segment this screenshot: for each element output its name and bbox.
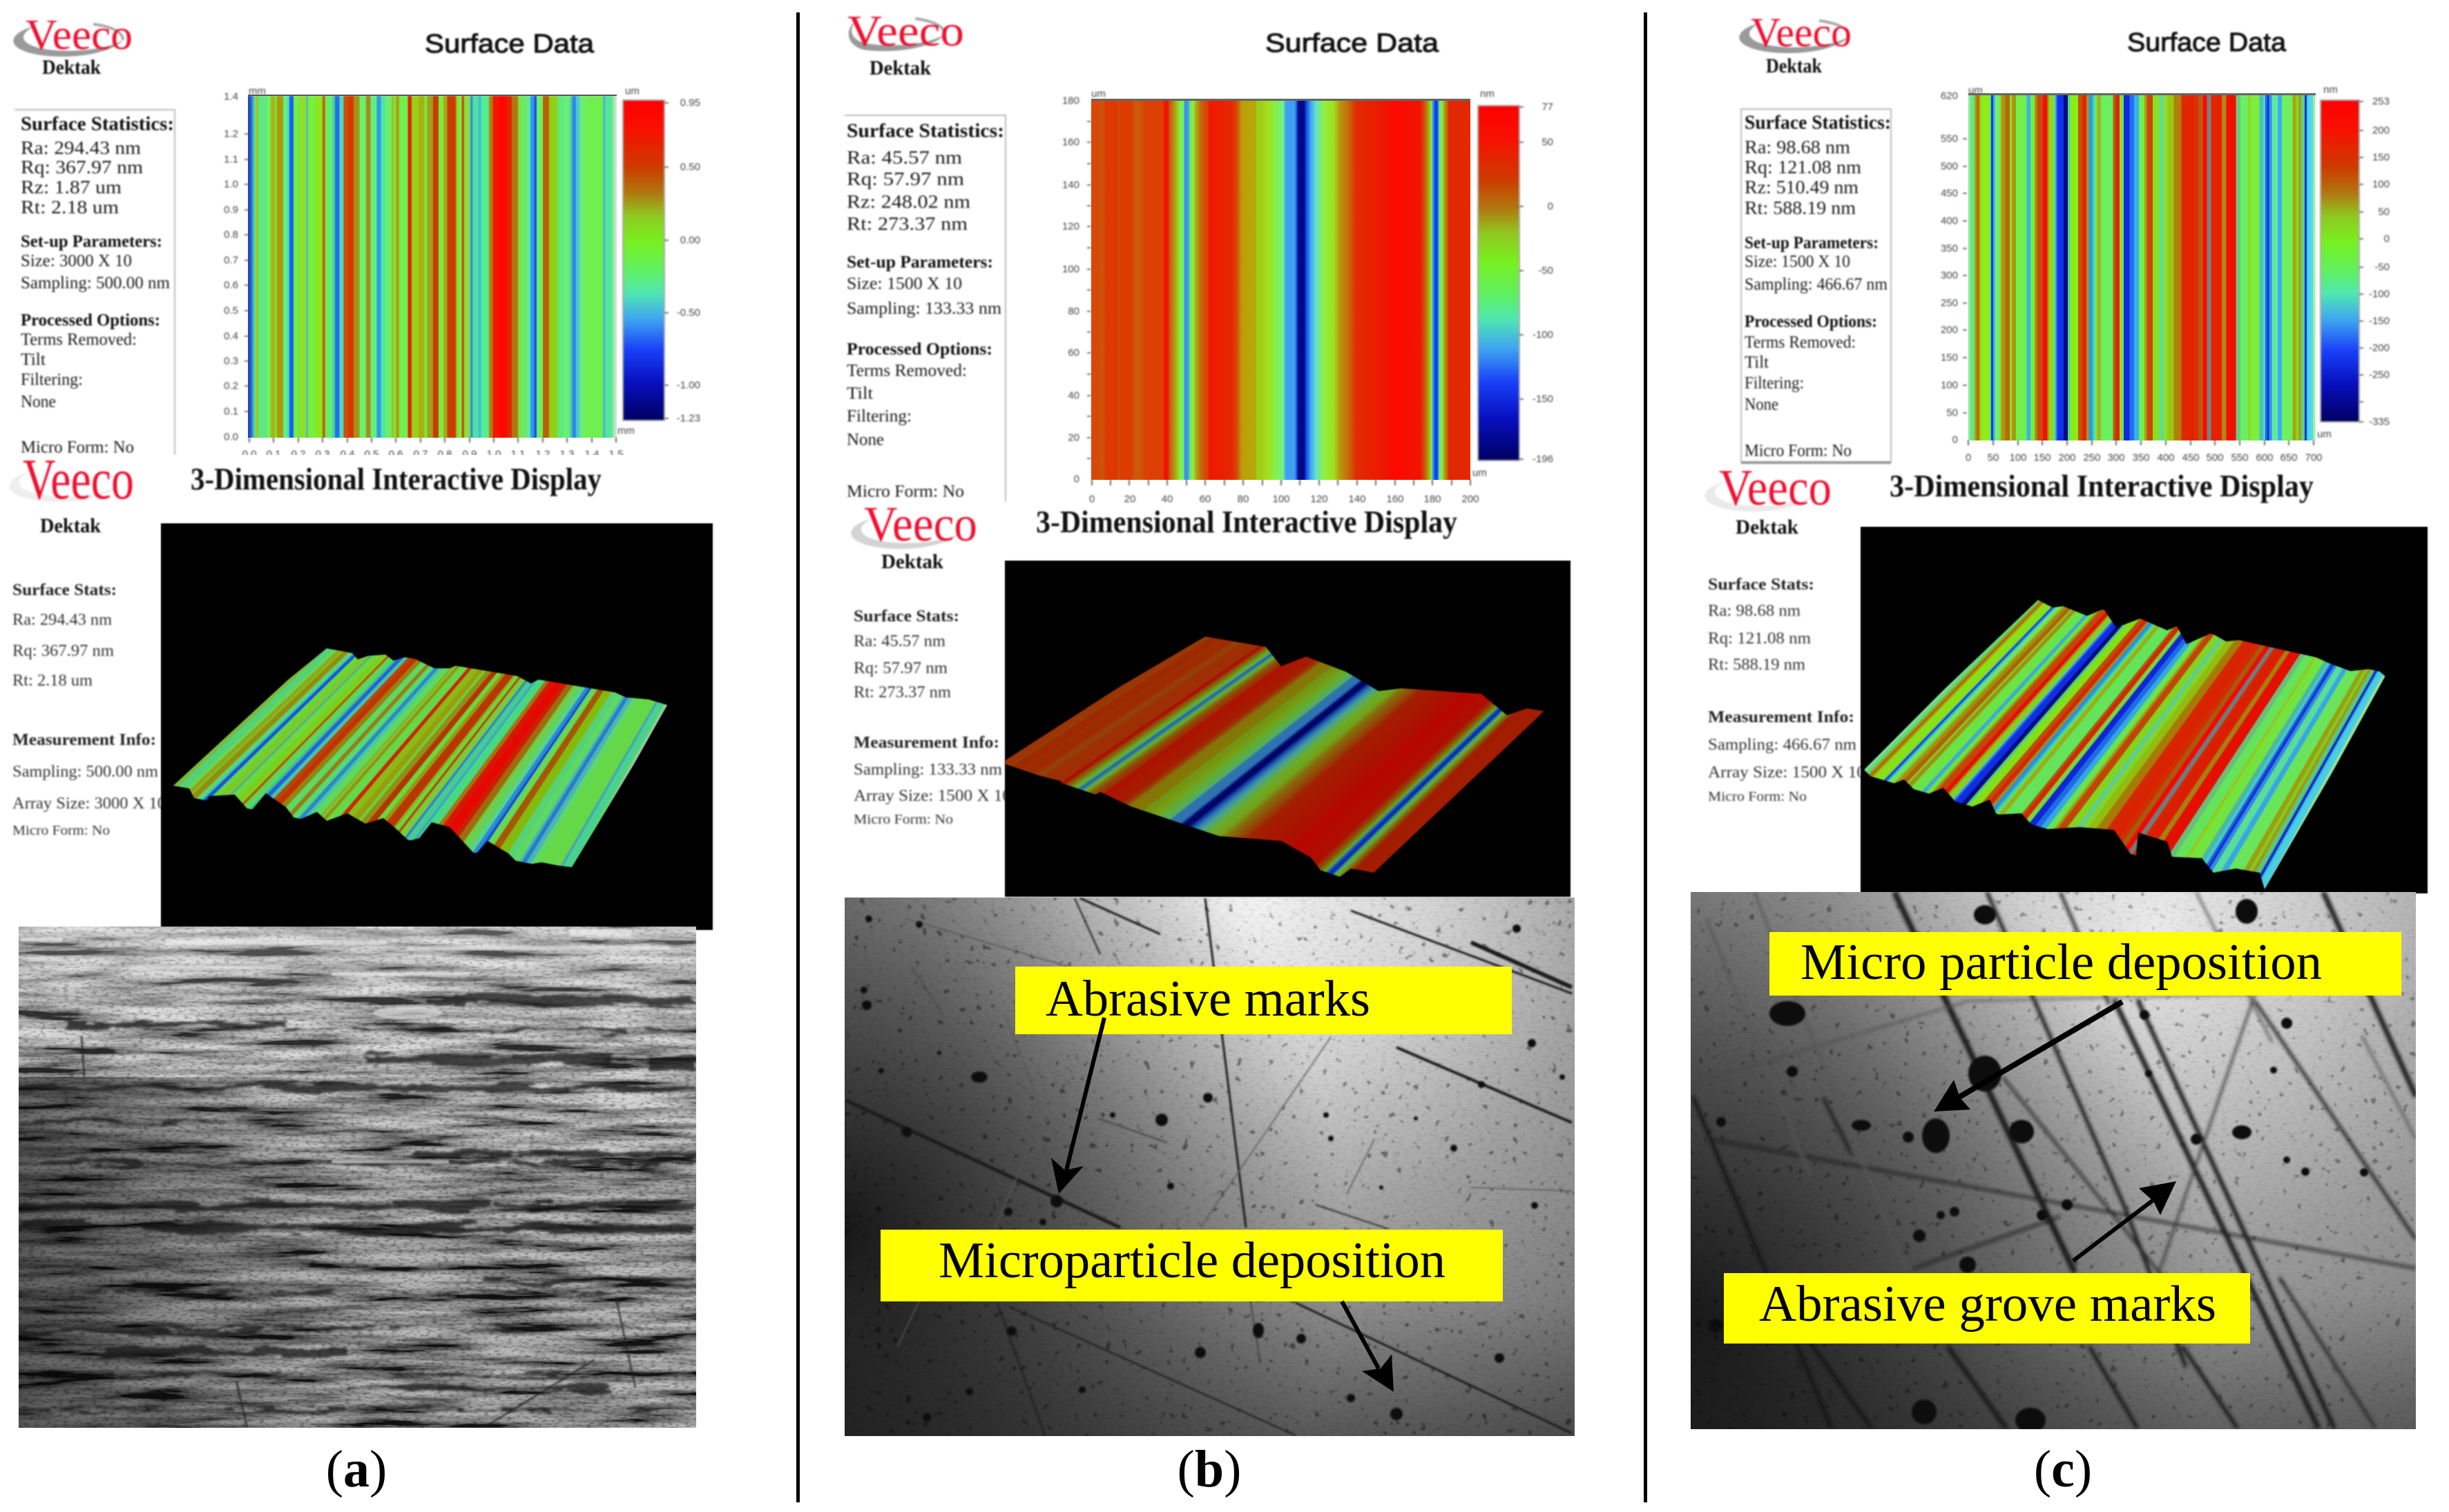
colour bar: 77 [1542,101,1553,113]
x axis labels: 100 [1272,493,1290,505]
panel b: 3-dimensional display header and statistics [805,504,1640,899]
y axis labels: 620 [1941,90,1958,102]
surface stats and measurement info: Sampling: 133.33 nm [854,761,1002,779]
colour bar: -150 [1533,394,1553,405]
x axis labels: 140 [1348,493,1366,505]
x axis labels: 500 [2206,452,2224,464]
surface statistics box: Size: 3000 X 10 [21,251,132,271]
surface statistics box: Micro Form: No [847,482,964,501]
colour bar: -50 [1538,265,1553,276]
callout: Micro particle deposition (panel c): Micro particle deposition [1800,934,2322,991]
fine cross scratch a [81,1036,635,1428]
y axis labels: 60 [1068,347,1079,359]
logo: Veeco Dektak: Veeco [1751,10,1852,55]
surface stats and measurement info: Array Size: 1500 X 10 [854,787,1011,805]
y axis labels: 80 [1068,305,1079,318]
surface stats and measurement info: Micro Form: No [1708,789,1807,804]
surface stats and measurement info: Surface Stats: [12,581,117,599]
jagged silhouette mask c [1861,594,2388,892]
surface statistics box: None [21,392,56,411]
panel b: 3D surface plot [1005,561,1571,897]
logo: Veeco Dektak [9,447,134,537]
x axis labels: 250 [2083,452,2101,464]
logo: Veeco Dektak: Veeco [847,6,964,55]
surface statistics box: Tilt [1745,353,1769,371]
surface statistics box [1741,109,1891,463]
callout: Microparticle deposition (panel b) [881,1230,1503,1301]
logo: Veeco Dektak: Dektak [870,57,931,79]
y axis labels: 450 [1941,188,1958,199]
surface stats and measurement info: Ra: 45.57 nm [854,632,945,650]
surface statistics box: Rz: 1.87 um [21,177,122,197]
surface statistics box: Size: 1500 X 10 [1745,253,1850,271]
colour bar: 0.50 [680,162,700,173]
colour bar: -50 [2374,261,2390,273]
surface stats and measurement info [854,608,1011,827]
panel c: surface data text, axes and colour bar [1738,10,2390,465]
logo: Veeco Dektak: Veeco [26,12,133,59]
surface stats and measurement info: Ra: 294.43 nm [12,611,112,629]
panel a: surface data text, axes and colour bar [12,12,701,456]
y axis labels: 350 [1941,243,1958,254]
axis unit labels: um [1968,84,1983,97]
surface statistics box: Set-up Parameters: [21,232,162,251]
logo: Veeco Dektak: Dektak [1766,55,1822,77]
logo: Veeco Dektak [851,496,977,573]
surface statistics box: Rt: 2.18 um [21,197,119,217]
x axis labels: 80 [1238,493,1249,505]
x axis labels: 60 [1200,493,1211,505]
surface statistics box: Rt: 588.19 nm [1745,197,1856,218]
axis unit labels [1968,84,2338,440]
heading: 3-Dimensional Interactive Display: 3-Dimensional Interactive Display [191,462,602,496]
surface statistics box: Rq: 121.08 nm [1745,157,1861,177]
scratches c [1691,892,2416,1428]
surface statistics box: Tilt [21,351,46,369]
colour bar [2321,95,2390,428]
x axis labels: 100 [2009,452,2027,464]
arrow: microparticle deposition pointer [1336,1300,1399,1395]
surface statistics box: Processed Options: [1745,312,1877,331]
arrow: abrasive marks pointer [1043,1015,1112,1198]
surface statistics box: Rz: 510.49 nm [1745,177,1859,197]
y axis labels: 0.6 [224,279,238,291]
surface statistics box: Sampling: 133.33 nm [847,300,1002,318]
y axis labels: 40 [1068,389,1079,402]
x axis labels: 300 [2107,452,2125,464]
x axis labels: 50 [1988,452,1999,464]
surface statistics box: Set-up Parameters: [847,253,993,272]
3D striped surface a [173,648,668,868]
surface statistics box: Rq: 57.97 nm [847,168,964,189]
y axis labels: 0.3 [224,355,238,367]
y axis labels: 180 [1062,95,1079,106]
colour bar [1478,101,1553,465]
axis unit labels: um [625,86,640,97]
y axis labels: 1.0 [224,178,238,191]
axis unit labels: nm [1480,88,1495,99]
panel b: surface data text, axes and colour bar [844,6,1554,505]
surface statistics box: Processed Options: [21,311,160,330]
surface statistics box: Filtering: [1745,374,1804,392]
y axis labels: 1.1 [224,153,238,166]
y axis labels: 0.4 [224,330,238,342]
y axis labels: 0 [1074,474,1079,485]
colour bar: 253 [2372,95,2390,108]
micrograph a: horizontal wear grooves [19,927,696,1428]
y axis labels: 500 [1941,160,1958,173]
colour bar: -250 [2369,369,2390,381]
surface stats and measurement info [1708,576,1865,804]
y axis labels: 100 [1941,380,1958,391]
surface stats and measurement info: Measurement Info: [12,731,156,749]
y axis labels: 50 [1946,407,1958,418]
colour bar [623,97,700,424]
colour bar: -196 [1533,453,1553,465]
y axis labels: 140 [1062,180,1079,191]
3D striped surface c [1861,595,2387,894]
x axis labels: 200 [2058,452,2076,464]
surface stats and measurement info: Measurement Info: [1708,708,1854,726]
x axis labels: 400 [2157,452,2175,464]
surface statistics box: Terms Removed: [1745,333,1856,352]
surface statistics box: Sampling: 500.00 nm [21,273,171,293]
y axis labels: 0.7 [224,254,238,266]
surface stats and measurement info: Array Size: 3000 X 10 [12,795,166,813]
x axis labels [1966,440,2323,464]
colour bar: -100 [2369,289,2390,300]
surface statistics box: Tilt [847,384,873,403]
scratches b [846,898,1572,1435]
colour bar: 0 [1548,200,1553,213]
logo: Veeco Dektak: Dektak [40,514,101,537]
logo: Veeco Dektak [1704,460,1832,539]
colour bar: -0.50 [677,307,700,319]
y axis labels: 0.2 [224,380,238,392]
y axis labels: 0.9 [224,204,238,215]
y axis labels [224,91,249,443]
x axis labels [242,437,623,460]
colour bar: -150 [2369,315,2390,327]
y axis labels: 550 [1941,133,1958,145]
x axis labels [1089,479,1479,505]
x axis labels: 150 [2033,452,2051,464]
surface statistics box: Processed Options: [847,340,992,359]
panel a: surface data report [12,12,701,456]
x axis labels: 550 [2231,452,2249,464]
surface statistics box: Terms Removed: [21,330,137,349]
smooth silhouette mask b [1004,631,1547,888]
surface statistics box: Terms Removed: [847,362,967,380]
x axis labels: 40 [1162,493,1173,505]
axis unit labels: um [1472,467,1487,479]
y axis labels: 20 [1068,432,1079,443]
heading: 3-Dimensional Interactive Display: 3-Dimensional Interactive Display [1890,469,2314,503]
panel a: 3-dimensional display header and statistics [0,455,794,931]
axis unit labels [249,86,640,436]
heading: 3-Dimensional Interactive Display: 3-Dimensional Interactive Display [1036,505,1457,539]
striped surface map c [1968,93,2316,440]
surface statistics box: Micro Form: No [1745,442,1852,460]
surface stats and measurement info: Rt: 588.19 nm [1708,656,1805,674]
colour bar: -1.23 [677,413,700,424]
y axis labels: 400 [1941,215,1958,226]
surface statistics box: Filtering: [847,407,912,425]
y axis labels: 1.2 [224,128,238,139]
x axis labels: 160 [1386,493,1404,505]
x axis labels: 450 [2182,452,2200,464]
y axis labels: 0.5 [224,305,238,316]
colour bar: -1.00 [677,380,700,391]
logo: Veeco Dektak [1739,10,1852,77]
panel b: surface data report [844,6,1554,505]
callout: Abrasive grove marks (panel c): Abrasive grove marks [1759,1276,2216,1332]
x axis labels: 0 [1966,452,1971,464]
panel b: 3D header text [851,504,1458,827]
panel c: 3D header text [1704,466,2314,804]
micrograph c: abrasive grooves and microparticles [1691,892,2416,1429]
surface statistics box: Surface Statistics: [847,120,1004,142]
x axis labels: 700 [2305,452,2323,464]
colour bar: 50 [1542,137,1553,148]
heading: Surface Data: Surface Data [425,30,595,59]
colour bar: -335 [2369,416,2390,428]
surface stats and measurement info: Ra: 98.68 nm [1708,602,1800,620]
panel c: 3D surface plot [1861,527,2428,893]
panel c: 3-dimensional display header and statistics [1651,466,2449,895]
jagged silhouette mask a [166,643,670,873]
x axis labels: 20 [1124,493,1135,505]
axis unit labels: mm [617,425,635,436]
x axis labels: 0 [1089,493,1095,505]
callout: Abrasive marks (panel b): Abrasive marks [1046,971,1370,1027]
y axis labels: 0 [1952,434,1958,446]
surface stats and measurement info: Sampling: 500.00 nm [12,763,158,781]
surface statistics box: Rz: 248.02 nm [847,191,970,212]
y axis labels: 1.4 [224,91,238,102]
surface stats and measurement info: Rq: 57.97 nm [854,659,948,677]
y axis labels: 100 [1062,264,1079,275]
axis unit labels [1091,88,1495,479]
panel a: 3D header text [10,455,602,838]
y axis labels: 0.8 [224,229,238,240]
logo: Veeco Dektak: Dektak [42,56,101,79]
heading: Surface Data: Surface Data [1265,29,1439,58]
colour bar: 0 [2384,233,2390,244]
surface statistics box: None [847,431,884,449]
surface statistics box: Sampling: 466.67 nm [1745,275,1888,294]
y axis labels [1062,95,1091,485]
arrow: abrasive grove marks pointer [2071,1177,2180,1263]
colour bar: -100 [1533,329,1553,341]
surface statistics box: Size: 1500 X 10 [847,275,962,293]
dark groove bands a [19,996,696,1411]
y axis labels: 120 [1062,221,1079,232]
colour bar: 150 [2372,152,2390,163]
surface statistics box: Set-up Parameters: [1745,233,1879,253]
surface statistics box: Ra: 45.57 nm [847,147,962,168]
particle deposits c [1709,899,2368,1433]
axis unit labels: um [2317,428,2332,440]
surface statistics box: Ra: 98.68 nm [1745,137,1850,157]
y axis labels: 300 [1941,269,1958,282]
axis unit labels: nm [2323,84,2338,95]
x axis labels: 200 [1461,493,1479,505]
surface statistics box: Surface Statistics: [1745,112,1891,134]
surface stats and measurement info [12,581,166,838]
panel c: surface data report [1738,10,2390,465]
logo: Veeco Dektak [13,12,133,79]
arrow: micro particle deposition pointer [1930,998,2127,1115]
colour bar: 100 [2372,178,2390,191]
colour bar: 0.00 [680,235,700,246]
y axis labels: 200 [1941,324,1958,336]
surface statistics box: Rt: 273.37 nm [847,213,968,234]
axis unit labels: um [1091,88,1106,99]
callout: Abrasive marks (panel b) [1015,967,1512,1034]
y axis labels: 160 [1062,137,1079,148]
y axis labels: 150 [1941,352,1958,363]
3D striped surface b [1001,632,1547,887]
surface statistics box: Filtering: [21,370,83,389]
surface stats and measurement info: Micro Form: No [854,812,953,827]
surface stats and measurement info: Surface Stats: [1708,576,1814,594]
surface statistics box: Rq: 367.97 nm [21,157,143,177]
logo: Veeco Dektak [847,6,964,79]
particle deposits b [861,915,1565,1422]
striped surface map a [248,95,617,438]
x axis labels: 650 [2280,452,2298,464]
surface statistics box: Surface Statistics: [21,113,174,135]
colour bar: 0.95 [680,97,700,109]
colour bar: 200 [2372,124,2390,137]
callout: Microparticle deposition (panel b): Microparticle deposition [939,1232,1446,1289]
surface stats and measurement info: Surface Stats: [854,608,959,626]
surface statistics box [15,110,175,457]
y axis labels: 250 [1941,297,1958,309]
striped surface map b [1091,99,1470,480]
surface stats and measurement info: Array Size: 1500 X 10 [1708,764,1865,782]
x axis labels: 120 [1310,493,1328,505]
colour bar: 50 [2378,206,2390,218]
heading: Surface Data: Surface Data [2127,28,2287,57]
y axis labels [1941,90,1967,446]
callout: Abrasive grove marks (panel c) [1724,1273,2250,1344]
surface stats and measurement info: Rt: 273.37 nm [854,684,951,701]
x axis labels: 180 [1423,493,1441,505]
surface stats and measurement info: Measurement Info: [854,734,999,752]
axis unit labels: mm [249,86,266,97]
colour bar: -200 [2369,342,2390,353]
surface stats and measurement info: Sampling: 466.67 nm [1708,736,1856,754]
surface statistics box [845,115,1006,502]
bright groove streaks a [21,929,670,1163]
surface stats and measurement info: Rq: 121.08 nm [1708,630,1811,648]
y axis labels: 0.0 [224,431,238,443]
surface statistics box: None [1745,395,1778,414]
surface statistics box: Ra: 294.43 nm [21,137,141,158]
micrograph b: abrasive marks and microparticles [845,898,1575,1436]
surface stats and measurement info: Rq: 367.97 nm [12,642,114,660]
x axis labels: 350 [2132,452,2150,464]
surface stats and measurement info: Rt: 2.18 um [12,672,93,690]
logo: Veeco Dektak: Dektak [1736,516,1798,539]
logo: Veeco Dektak: Dektak [881,550,943,573]
x axis labels: 600 [2256,452,2274,464]
y axis labels: 0.1 [224,406,238,417]
panel a: 3D surface plot [161,523,713,930]
surface stats and measurement info: Micro Form: No [12,823,110,838]
